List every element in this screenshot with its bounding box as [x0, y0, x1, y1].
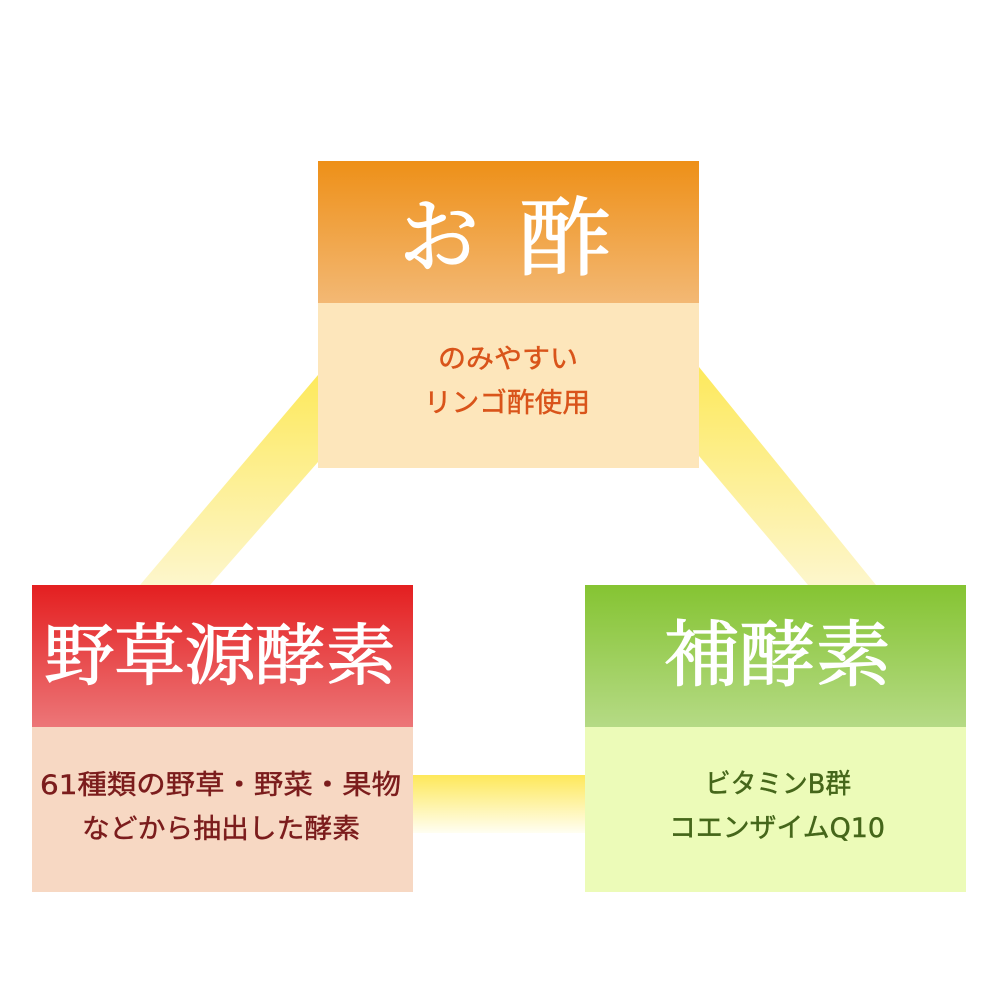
text: ビタミンB群 コエンザイムQ10 — [669, 769, 885, 844]
connector: left diagonal — [140, 375, 318, 585]
text: ビタミンB群 コエンザイムQ10: ビタミンB群 — [705, 769, 851, 800]
heading: お酢: 酢 — [519, 191, 611, 287]
text: 61種類の野草・野菜・果物 などから抽出した酵素: 61種類の野草・野菜・果物 — [40, 770, 401, 801]
header band: 野草源酵素 — [32, 585, 413, 727]
heading: お酢: お — [399, 192, 479, 283]
text: のみやすい リンゴ酢使用: リンゴ酢使用 — [424, 388, 590, 419]
body: お酢 — [318, 303, 699, 468]
heading: 野草源酵素: 野草源酵素 — [44, 620, 396, 694]
panel: 補酵素 — [585, 585, 966, 892]
heading: 補酵素: 補酵素 — [664, 616, 891, 696]
connector: right diagonal — [699, 367, 876, 585]
panel: 野草源酵素 — [32, 585, 413, 892]
connector: bottom horizontal — [413, 775, 585, 833]
body: 野草源酵素 — [32, 727, 413, 892]
heading: お酢 — [399, 191, 611, 287]
text: 61種類の野草・野菜・果物 などから抽出した酵素: などから抽出した酵素 — [82, 814, 360, 845]
text: のみやすい リンゴ酢使用: のみやすい — [438, 344, 578, 375]
text: 61種類の野草・野菜・果物 などから抽出した酵素 — [40, 770, 401, 845]
text: ビタミンB群 コエンザイムQ10: コエンザイムQ10 — [669, 813, 885, 844]
header band: 補酵素 — [585, 585, 966, 727]
header band: お酢 — [318, 161, 699, 303]
body: 補酵素 — [585, 727, 966, 892]
panel: お酢 — [318, 161, 699, 468]
text: のみやすい リンゴ酢使用 — [424, 344, 590, 419]
